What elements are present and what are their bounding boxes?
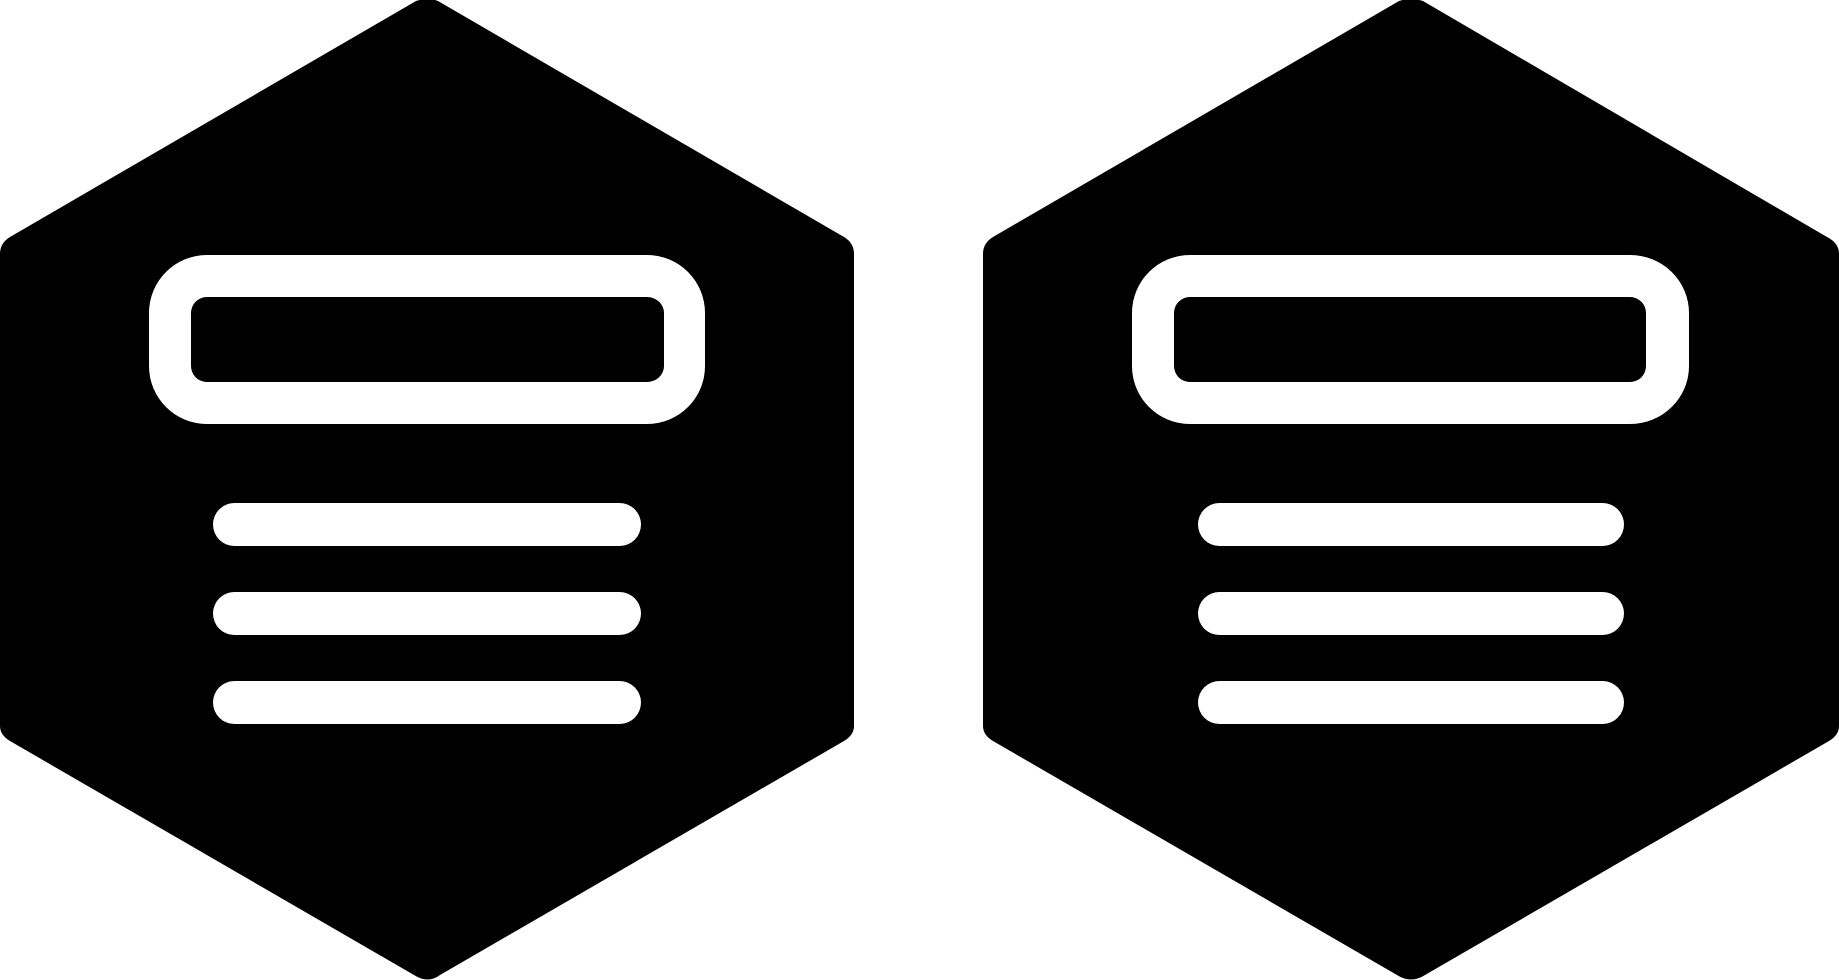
text line 2 xyxy=(1198,592,1624,635)
text line 1 xyxy=(213,503,641,546)
header frame xyxy=(1132,255,1689,424)
text line 3 xyxy=(213,681,641,724)
icon: left hexagon document xyxy=(0,0,854,980)
header frame xyxy=(149,255,705,424)
text line 2 xyxy=(213,592,641,635)
icon: right hexagon document xyxy=(983,0,1839,980)
hexagon body xyxy=(983,0,1839,980)
text line 1 xyxy=(1198,503,1624,546)
text line 3 xyxy=(1198,681,1624,724)
hexagon body xyxy=(0,0,854,980)
